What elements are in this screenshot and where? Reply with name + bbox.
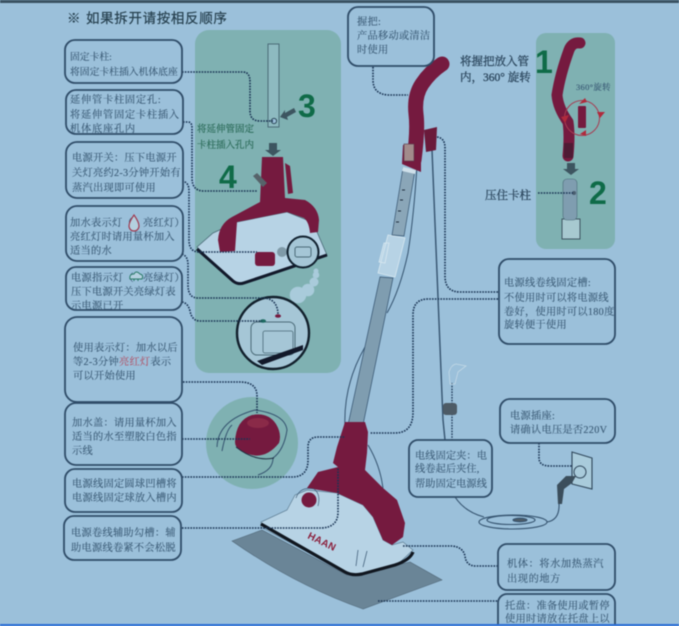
icon: steam cloud	[130, 272, 143, 281]
callout: ready indicator: 等2-3分钟亮红灯表示	[73, 357, 171, 368]
callout: cord hook: 助电源线卷紧不会松脱	[71, 541, 176, 554]
knob	[296, 488, 319, 508]
step number 1: 1	[535, 44, 553, 80]
callout: water indicator: 亮红灯）	[143, 216, 185, 229]
callout: body: 出现的地方	[507, 572, 561, 585]
callout: grip: 时使用	[357, 43, 388, 56]
callout: body: 机体：将水加热蒸汽	[507, 559, 604, 570]
iron body	[261, 490, 413, 575]
callout: cord winding slot	[499, 259, 615, 344]
callout: cord hook	[64, 516, 181, 560]
wall socket and plug	[557, 452, 592, 504]
callout: cord winding slot: 卷好，使用时可以180度	[504, 305, 615, 318]
callout: fixing pin: 固定卡柱:	[70, 52, 112, 63]
callout: ready indicator: 可以开始使用	[73, 369, 136, 382]
callout: cord ball groove	[65, 469, 182, 512]
cord clip and plug	[443, 364, 466, 440]
panel: assembly steps 1 and 2	[535, 33, 615, 249]
tray	[232, 530, 442, 609]
zoom bubbles	[290, 269, 319, 303]
callout: power switch: 关灯亮约2-3分钟开始有	[72, 166, 181, 179]
icon: water drop	[129, 215, 139, 231]
title: ※	[67, 11, 80, 26]
instruction: insert tube: 将延伸管固定	[197, 125, 254, 135]
callout: cord winding slot: 电源线卷线固定槽:	[504, 278, 591, 289]
callout: water indicator: 亮红灯时请用量杯加入	[70, 230, 175, 243]
callout: cord clip	[409, 440, 492, 497]
callout: tray	[498, 594, 615, 626]
instruction: rotate handle: 将握把放入管	[460, 56, 529, 68]
arrow pointing to tube hole	[280, 108, 296, 120]
steam mop product	[232, 64, 445, 609]
callout: water indicator	[66, 206, 185, 261]
callout: grip: 产品移动或清洁	[357, 29, 430, 42]
label: press pin: 压住卡柱	[485, 188, 531, 202]
panel: assembly steps 3 and 4	[195, 30, 341, 373]
callout: power switch	[66, 142, 183, 198]
callout: power indicator	[66, 267, 185, 312]
iron base with handle	[197, 157, 327, 284]
callout: power socket: 请确认电压是否220V	[510, 423, 608, 436]
callout: water cap: 示线	[72, 444, 93, 457]
callout: tube pin hole: 机体底座孔内	[70, 122, 136, 135]
power cords	[345, 150, 445, 488]
callout: tube pin hole: 延伸管卡柱固定孔:	[70, 95, 162, 106]
callout: cord hook: 电源卷线辅助勾槽：辅	[71, 528, 176, 539]
callout: water indicator: 加水表示灯（	[70, 218, 133, 229]
callout: power indicator: 亮绿灯）	[143, 271, 185, 284]
title: 如果拆开请按相反顺序	[86, 11, 228, 26]
arrow down	[563, 163, 579, 175]
callout: cord ball groove: 电源线固定球放入槽内	[72, 491, 177, 504]
callout: fixing pin: 将固定卡柱插入机体底座	[70, 65, 178, 78]
callout: tube pin hole	[66, 90, 183, 135]
round inset: water cap	[206, 397, 298, 489]
callout: fixing pin	[65, 40, 182, 83]
callout: power socket	[500, 399, 615, 443]
callout: ready indicator: 使用表示灯：加水以后	[73, 343, 178, 354]
callout: grip	[348, 7, 434, 66]
handle	[402, 64, 442, 172]
handle part	[557, 43, 586, 158]
callout: cord clip: 帮助固定电源线	[415, 477, 487, 490]
callout: cord ball groove: 电源线固定圆球凹槽将	[72, 479, 177, 490]
steam base neck	[307, 422, 405, 545]
upper tube	[392, 167, 416, 236]
callout: tray: 托盘：准备使用或暂停	[505, 601, 610, 612]
step number 2: 2	[589, 175, 607, 211]
step number 4: 4	[219, 159, 237, 195]
callout: cord clip: 电线固定夹：电	[415, 451, 487, 462]
instruction: insert tube: 卡柱插入孔内	[197, 139, 254, 151]
callout: power indicator: 压下电源开关亮绿灯表	[71, 285, 176, 298]
callout: water cap	[65, 403, 182, 465]
tube sleeve	[378, 235, 405, 277]
rotate label: 360°旋转	[576, 82, 611, 92]
callout: body	[498, 544, 615, 590]
callout: cord winding slot: 不使用时可以将电源线	[504, 291, 609, 304]
rotation circle	[561, 98, 605, 136]
instruction: rotate handle: 内，360° 旋转	[460, 70, 531, 84]
lower tube	[562, 179, 580, 239]
callout: ready indicator	[65, 317, 182, 402]
callout: power socket: 电源插座:	[510, 411, 555, 422]
callout: power indicator: 电源指示灯（	[71, 273, 134, 284]
magnified indicator lights	[237, 297, 309, 369]
arrow down to base	[265, 143, 281, 156]
callout: water indicator: 适当的水	[70, 244, 112, 257]
step number 3: 3	[298, 88, 316, 124]
callout: cord clip: 线卷起后夹住,	[415, 462, 479, 475]
callout: power indicator: 示电源已开	[71, 299, 123, 312]
callout: tube pin hole: 将延伸管固定卡柱插入	[70, 108, 180, 121]
extension tube	[268, 44, 279, 127]
callout: power switch: 蒸汽出现即可使用	[72, 181, 156, 194]
callout: water cap: 加水盖：请用量杯加入	[72, 418, 177, 429]
power cord coil	[455, 497, 559, 529]
lower tube	[348, 277, 393, 425]
callout: grip: 握把:	[357, 17, 381, 28]
callout: power switch: 电源开关：压下电源开	[72, 153, 177, 164]
leader lines	[182, 67, 573, 601]
callout: water cap: 适当的水至塑胶白色指	[72, 430, 177, 443]
callout: tray: 使用时请放在托盘上以	[505, 612, 610, 625]
brand logo: HAAN	[306, 531, 338, 554]
callout: cord winding slot: 旋转便于使用	[504, 318, 567, 331]
